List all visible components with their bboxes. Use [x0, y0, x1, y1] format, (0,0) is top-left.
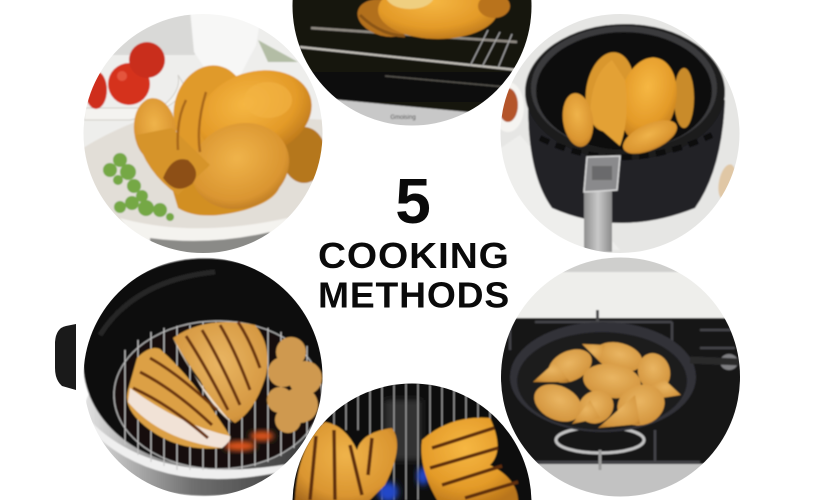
right grilled chicken [421, 418, 518, 500]
embers [224, 431, 274, 451]
large plate [84, 112, 322, 228]
title line: cooking: COOKING [318, 235, 510, 276]
pot interior [83, 258, 327, 466]
icon: pot side handle [55, 324, 76, 390]
photo: whole chicken in oven [290, 0, 535, 130]
photo: roast chicken on plate [80, 10, 330, 256]
stove knob [720, 354, 738, 370]
white cup [190, 14, 258, 75]
photo: chicken breasts over grill [290, 380, 535, 500]
oven racks [311, 28, 517, 42]
chicken drumsticks [528, 337, 681, 432]
fryer handle [584, 156, 620, 252]
roast chicken [353, 0, 510, 43]
parsley garnish [103, 153, 174, 221]
wire rack [125, 322, 307, 470]
title [318, 165, 510, 315]
wooden utensil [718, 164, 734, 198]
photo: whole chicken in air fryer [492, 10, 745, 255]
grilled chicken pieces [127, 322, 322, 449]
roast chicken [132, 64, 322, 216]
title number 5: 5 [395, 165, 431, 237]
grill grate [322, 384, 490, 500]
photo: chicken breasts on rack in pot [80, 255, 330, 500]
skillet [510, 322, 740, 432]
small plate with tomatoes [84, 42, 184, 120]
air fryer body [528, 100, 725, 223]
roast chicken [559, 49, 694, 161]
photo: chicken pieces in skillet on stove [495, 255, 745, 500]
side bowl of spices [500, 83, 524, 132]
oven brand text: Gmoising [390, 115, 416, 121]
stove top [495, 318, 745, 468]
silver oven base [336, 98, 470, 126]
title line: methods: METHODS [318, 275, 510, 315]
pot base [86, 394, 312, 496]
blue flames [378, 467, 429, 500]
burner [556, 427, 644, 453]
left grilled chicken [295, 422, 397, 500]
